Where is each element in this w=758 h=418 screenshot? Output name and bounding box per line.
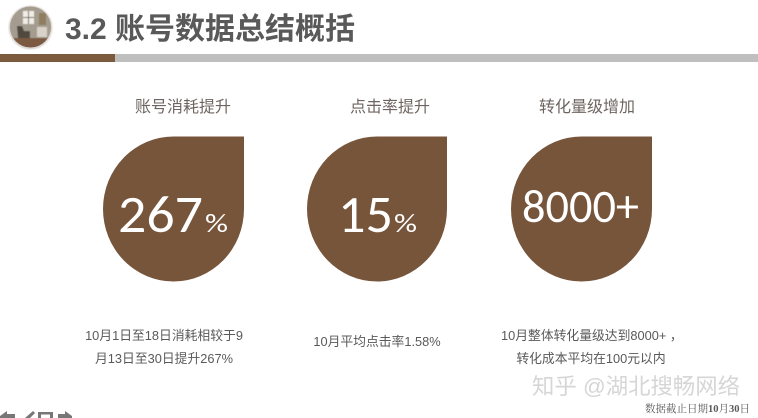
description: consumption: 月13日至30日提升267% [95,351,233,366]
icons: cropped toolbar [0,411,72,418]
heading: conversion: 转化量级增加 [539,99,635,116]
description: conversion: 转化成本平均在100元以内 [516,351,666,366]
watermark: 知乎 @湖北搜畅网络 [532,374,740,399]
heading: consumption: 账号消耗提升 [135,99,231,116]
drop: 267%: % [205,207,228,239]
description: conversion: 10月整体转化量级达到8000+ ， [501,328,683,343]
drop: 15%: 15 [338,182,393,246]
drop: 267%: 267 [118,182,203,246]
header bar: brown segment [0,54,115,62]
header bar: grey segment [115,54,758,62]
description: consumption: 10月1日至18日消耗相较于9 [85,328,243,343]
drop: 15%: % [394,207,417,239]
description: click rate: 10月平均点击率1.58% [313,334,441,349]
title: 3.2 账号数据总结概括 [65,13,355,46]
data cutoff note: 数据截止日期10月30日 [645,404,750,415]
icon: round room photo [8,5,53,50]
drop: 8000+: 8000+ [522,179,639,235]
description: consumption [85,328,243,366]
description: conversion [501,328,683,366]
heading: click rate: 点击率提升 [350,99,430,116]
